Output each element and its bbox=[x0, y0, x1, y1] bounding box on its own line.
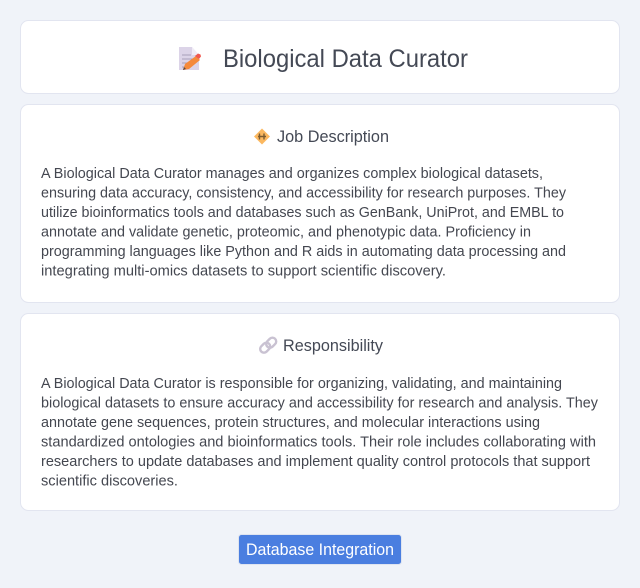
button: database integration bbox=[238, 534, 402, 564]
text block: job description: programming languages like Python and R aids in automating data processing and bbox=[41, 244, 566, 260]
heading: responsibility: Responsibility bbox=[283, 337, 384, 355]
panel: title bbox=[20, 20, 620, 94]
icon: chain link bbox=[259, 336, 278, 354]
icon: document with pencil bbox=[179, 47, 201, 70]
text block: responsibility: A Biological Data Curator is responsible for organizing, validating, and maintaining bbox=[41, 376, 562, 392]
button: database integration: Database Integration bbox=[246, 541, 394, 559]
text block: job description: integrating multi-omics datasets to support scientific discovery. bbox=[41, 264, 446, 280]
icon: diamond sign bbox=[254, 128, 270, 144]
text block: job description: ensuring data accuracy, consistency, and accessibility for research purposes. They bbox=[41, 186, 567, 202]
text block: responsibility: researchers to update databases and implement quality control protocols that support bbox=[41, 454, 590, 470]
text block: responsibility bbox=[41, 376, 599, 490]
text block: responsibility: scientific discoveries. bbox=[41, 474, 178, 490]
text block: job description: A Biological Data Curator manages and organizes complex biological datasets, bbox=[41, 166, 543, 182]
heading: job description: Job Description bbox=[277, 128, 389, 146]
title text: Biological Data Curator bbox=[223, 45, 468, 73]
text block: responsibility: standardized ontologies and bioinformatics tools. Their role includes collaborating with bbox=[41, 434, 596, 450]
text block: responsibility: annotate gene sequences, protein structures, and molecular interactions using bbox=[41, 415, 540, 431]
panel: job description bbox=[20, 104, 620, 302]
text block: job description: annotate and validate genetic, proteomic, and phenotypic data. Proficiency in bbox=[41, 224, 531, 240]
text block: job description: utilize bioinformatics tools and databases such as GenBank, UniProt, and EMBL to bbox=[41, 205, 564, 221]
text block: responsibility: biological datasets to ensure accuracy and accessibility for research and analysis. They bbox=[41, 396, 599, 412]
text block: job description bbox=[41, 166, 567, 280]
panel: responsibility bbox=[20, 314, 620, 510]
